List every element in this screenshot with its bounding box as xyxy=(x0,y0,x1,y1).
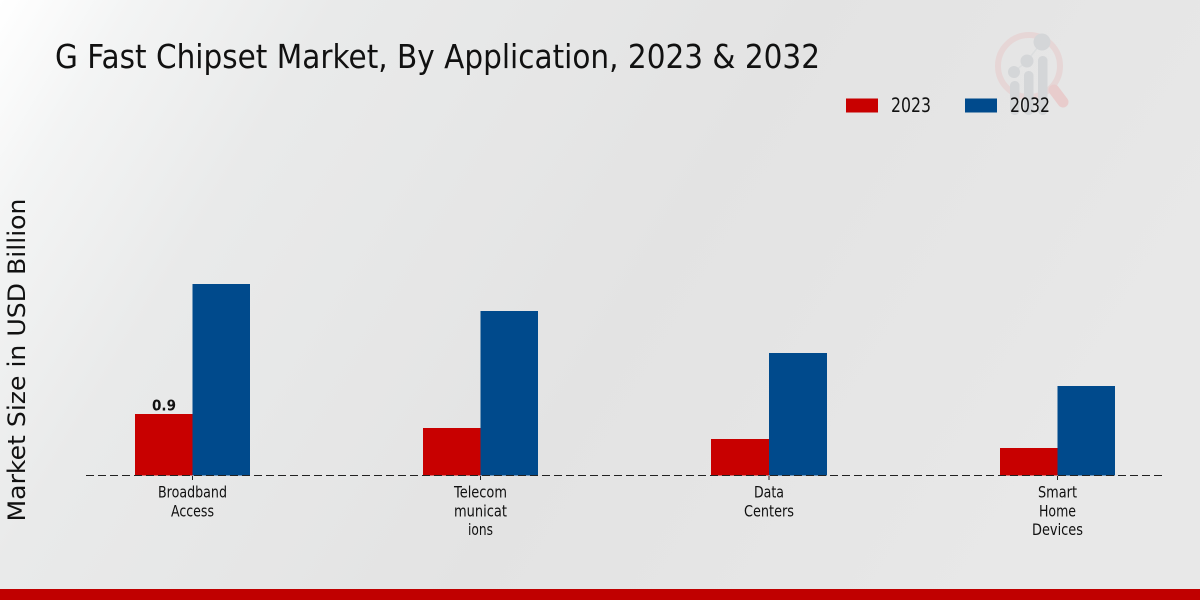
x label: Smart Home Devices: Home xyxy=(1039,502,1076,520)
x label: Smart Home Devices: Smart xyxy=(1038,482,1077,502)
icon: watermark logo xyxy=(998,34,1063,115)
legend xyxy=(846,94,1050,117)
y axis label: Market Size in USD Billion xyxy=(3,198,31,522)
bars: Broadband Access xyxy=(135,284,250,476)
x label: Data Centers xyxy=(744,482,794,520)
bars: Smart Home Devices xyxy=(1000,386,1115,476)
x label: Telecommunications: Telecom xyxy=(453,482,507,502)
value label: 0.9: 0.9 xyxy=(152,396,176,414)
x label: Broadband Access xyxy=(158,482,227,520)
x label: Telecommunications: ions xyxy=(468,520,493,539)
x label: Smart Home Devices: Devices xyxy=(1032,520,1083,539)
legend item: 2032: 2032 xyxy=(1010,94,1050,117)
legend item: 2023 xyxy=(846,94,931,117)
x label: Telecommunications xyxy=(453,482,507,539)
bars: Data Centers xyxy=(711,353,827,476)
x label: Broadband Access: Broadband xyxy=(158,482,227,502)
bars: Telecommunications xyxy=(423,311,538,476)
title: G Fast Chipset Market, By Application, 2023 & 2032 xyxy=(55,37,820,76)
x label: Telecommunications: municat xyxy=(454,502,507,520)
x label: Data Centers: Centers xyxy=(744,502,794,520)
bar chart xyxy=(86,284,1164,480)
x label: Data Centers: Data xyxy=(754,482,784,502)
legend item: 2032 xyxy=(965,94,1050,117)
x label: Smart Home Devices xyxy=(1032,482,1083,539)
footer bar xyxy=(0,589,1200,600)
x label: Broadband Access: Access xyxy=(171,502,214,520)
legend item: 2023: 2023 xyxy=(891,94,931,117)
